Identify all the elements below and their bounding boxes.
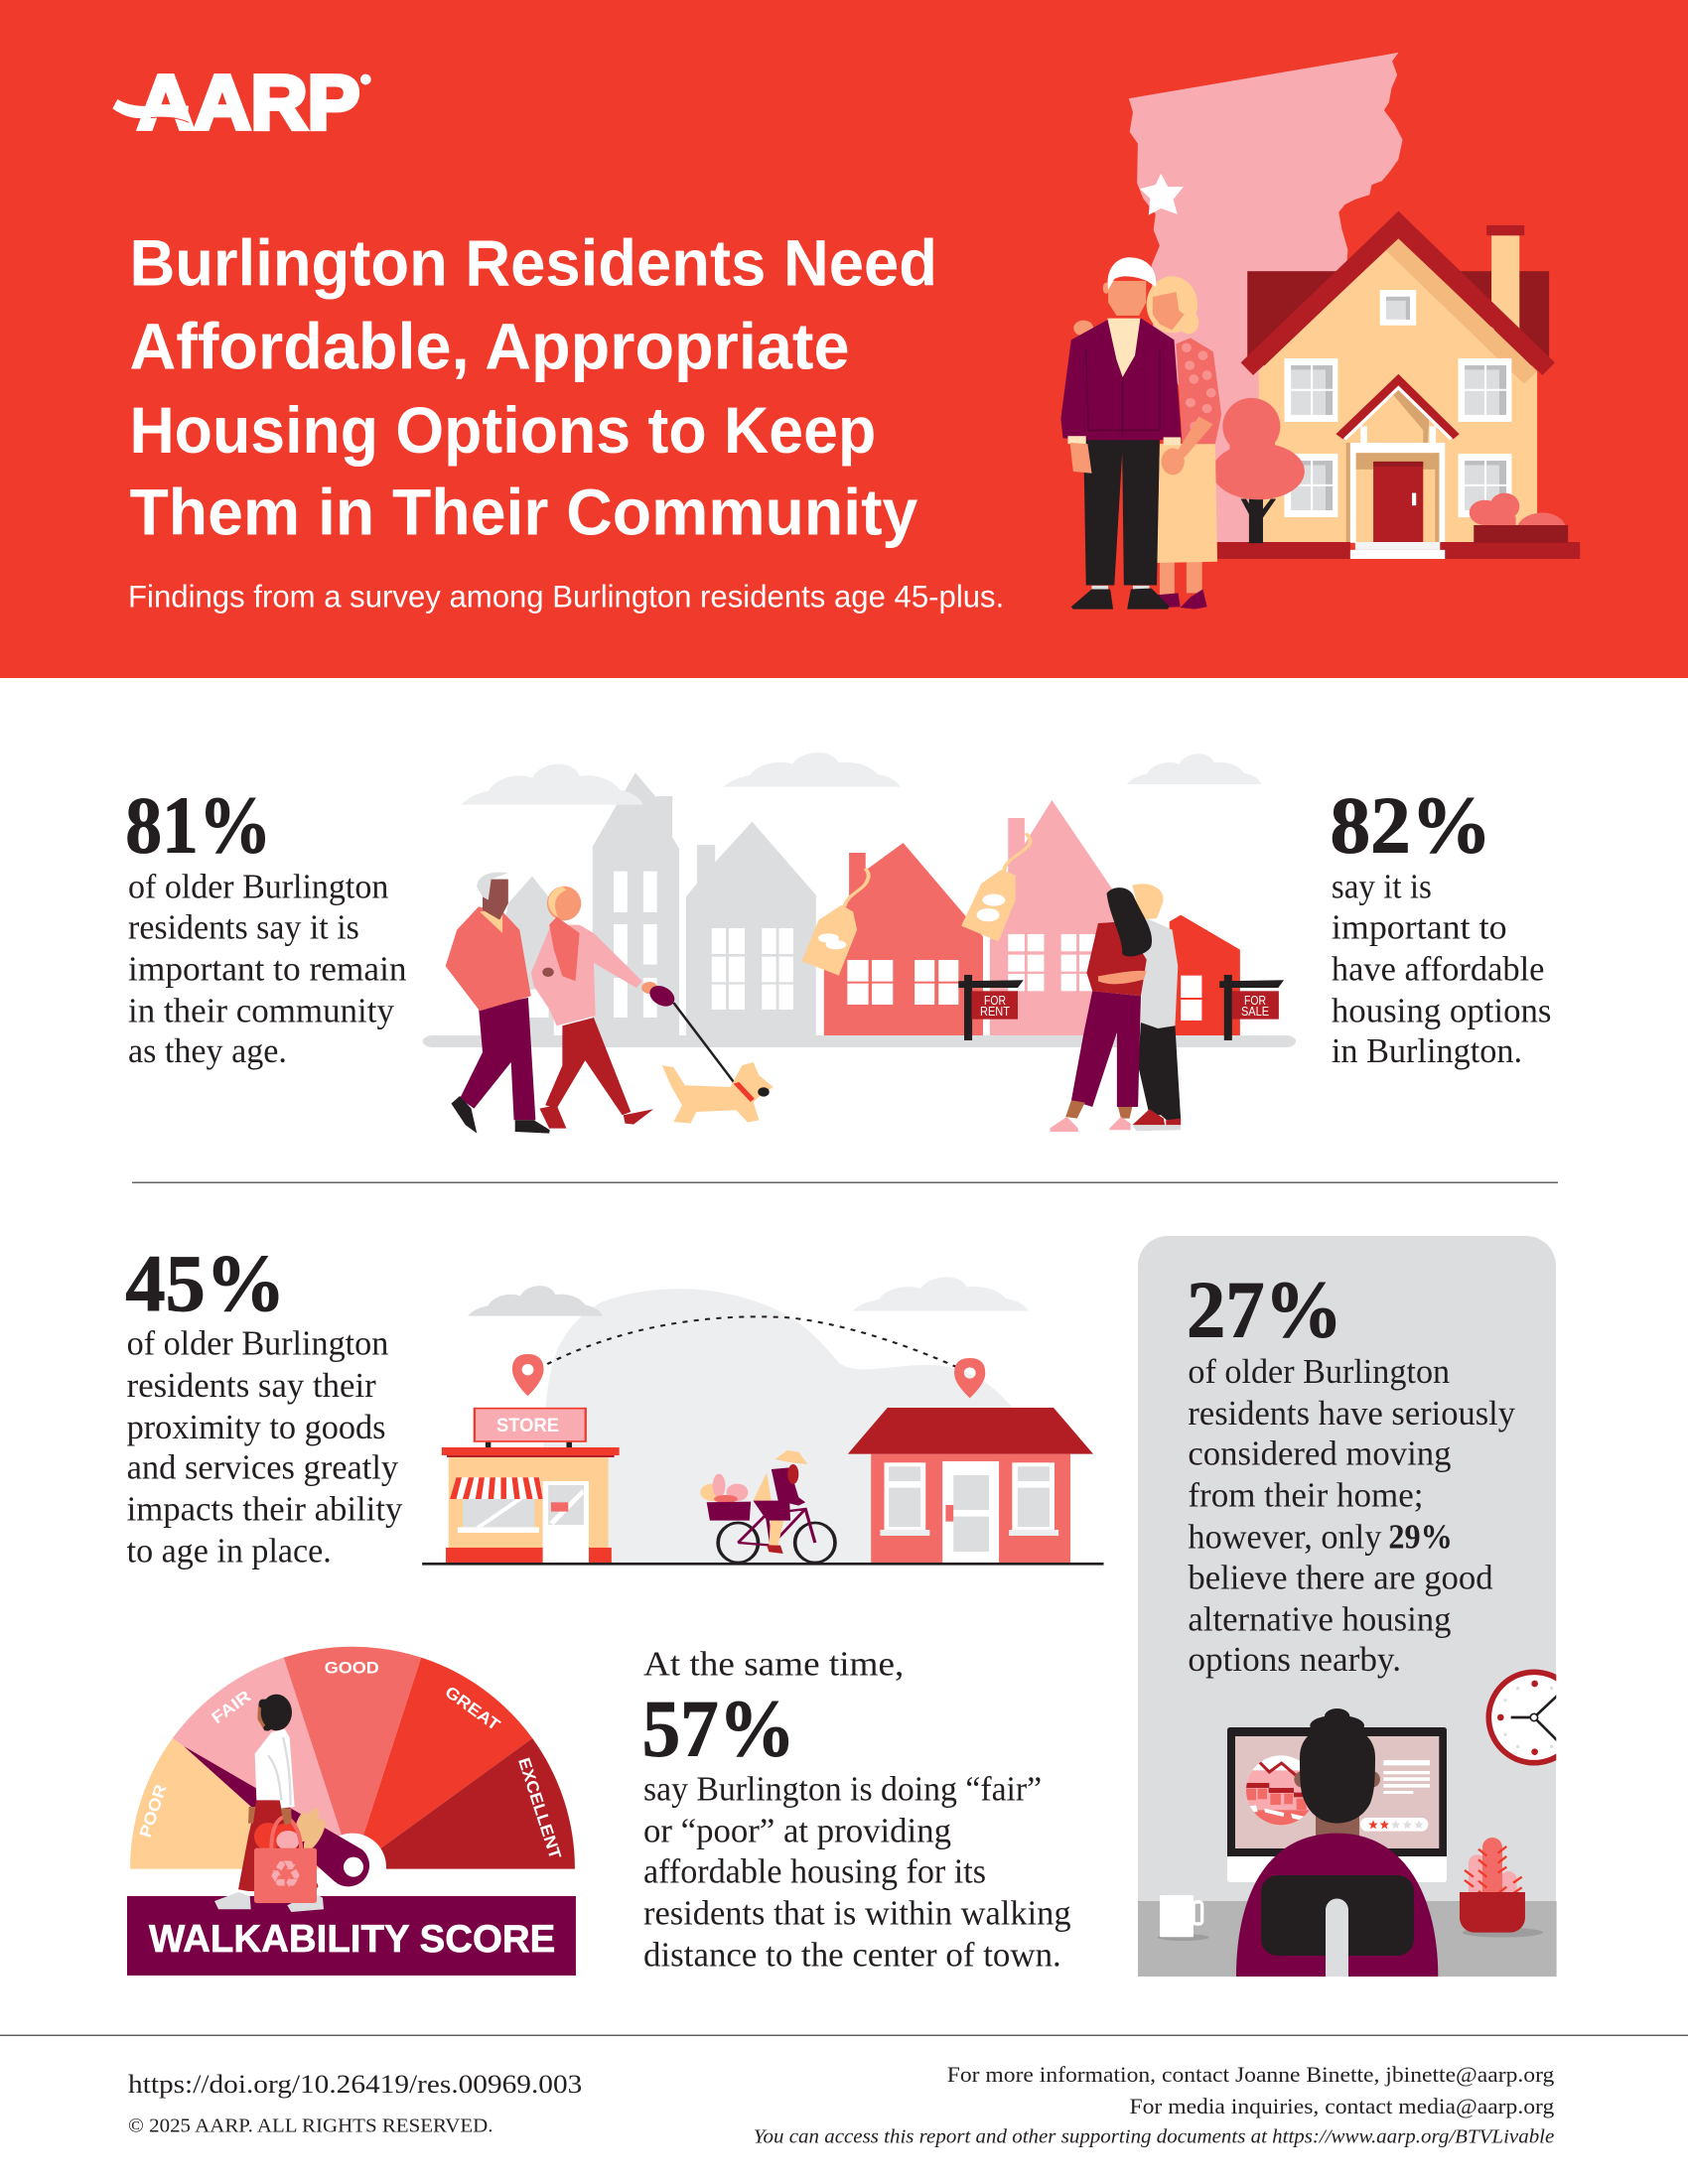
- walking couple: man: [446, 873, 550, 1134]
- house: [1217, 211, 1580, 559]
- panel text: alternative housing: [1188, 1599, 1452, 1638]
- clock: [1485, 1670, 1557, 1765]
- sign text: for sale: FOR: [1244, 994, 1266, 1008]
- embracing couple: [1050, 884, 1181, 1132]
- sign text: for rent: FOR: [984, 994, 1006, 1008]
- stat: 45%: proximity to goods: [127, 1408, 386, 1446]
- panel: 27% moving considered: [1138, 1236, 1580, 1977]
- title: Affordable, Appropriate: [129, 310, 850, 383]
- stat: 82%: [1330, 780, 1551, 1070]
- stat: 82%: 82%: [1330, 780, 1491, 870]
- panel text: from their home;: [1188, 1476, 1423, 1515]
- dashed route: [547, 1316, 955, 1367]
- ground line: [422, 1563, 1104, 1566]
- title: [129, 226, 937, 549]
- segment: great: [352, 1658, 532, 1869]
- state map of Vermont: [1129, 53, 1403, 542]
- cactus plant: [1460, 1838, 1543, 1938]
- segment: poor: [130, 1738, 352, 1869]
- desk: [1138, 1901, 1557, 1977]
- grey houses: [486, 772, 816, 1035]
- stat: 45%: residents say their: [127, 1366, 376, 1405]
- coral house: [824, 843, 983, 1035]
- store building: [442, 1409, 620, 1563]
- label: fair: FAIR: [208, 1687, 254, 1727]
- illustration: street with houses, walkers and couple: [423, 752, 1296, 1134]
- stat: 82%: important to: [1332, 907, 1507, 946]
- road: [423, 1035, 1296, 1047]
- stat: 82%: in Burlington.: [1332, 1031, 1522, 1070]
- woman with grocery bag: ♻: [268, 1853, 302, 1898]
- sign text: for sale: SALE: [1241, 1005, 1269, 1019]
- panel text: 27%: [1187, 1265, 1342, 1354]
- stat: 45%: impacts their ability: [127, 1490, 403, 1529]
- panel text: residents have seriously: [1188, 1394, 1515, 1433]
- stat: 81%: [125, 780, 407, 1070]
- stat: 57%: or “poor” at providing: [643, 1812, 951, 1850]
- icon: location star: [1140, 174, 1184, 215]
- dog on leash: [645, 984, 774, 1124]
- panel text: options nearby.: [1188, 1640, 1401, 1679]
- segment: good: [284, 1647, 421, 1869]
- panel text: believe there are good: [1188, 1558, 1493, 1596]
- segment: fair: [173, 1658, 352, 1869]
- sign text: for rent: RENT: [980, 1005, 1010, 1019]
- panel text: of older Burlington: [1188, 1352, 1450, 1391]
- logo: AARP: AARP: [137, 61, 359, 145]
- stat: 57%: say Burlington is doing “fair”: [643, 1770, 1042, 1809]
- title: Housing Options to Keep: [129, 393, 876, 467]
- cloud over grey house: [462, 764, 643, 805]
- stat: 45%: to age in place.: [127, 1532, 332, 1570]
- needle: [184, 1746, 369, 1886]
- stat: 82%: housing options: [1332, 992, 1551, 1030]
- label: poor: POOR: [136, 1782, 171, 1840]
- footer right: For media inquiries, contact media@aarp.org: [1130, 2095, 1554, 2118]
- for rent sign post: [958, 975, 1024, 1040]
- home building: [848, 1408, 1093, 1563]
- label: great: GREAT: [442, 1683, 503, 1734]
- stat: 82%: have affordable: [1332, 949, 1544, 988]
- sign text: for rent: [980, 994, 1010, 1019]
- illustration: person at computer: [1138, 1672, 1580, 1977]
- panel background: [1138, 1236, 1556, 1975]
- stat: 81%: as they age.: [128, 1031, 287, 1070]
- header banner: [0, 0, 1688, 678]
- stat: 81%: 81%: [125, 780, 272, 870]
- red house: [1170, 915, 1240, 1035]
- price tag left: [801, 869, 869, 976]
- panel text: considered moving: [1188, 1434, 1452, 1473]
- pin: home: [954, 1358, 985, 1398]
- stat: 45%: 45%: [125, 1239, 286, 1328]
- tree: [1212, 398, 1305, 543]
- stat: 57%: residents that is within walking: [643, 1893, 1071, 1932]
- stat: 57%: 57%: [642, 1685, 795, 1774]
- banner: walkability score: [127, 1896, 576, 1976]
- gauge: walkability score: [127, 1647, 576, 1976]
- sign text: for sale: [1241, 994, 1269, 1019]
- footer left: https://doi.org/10.26419/res.00969.003: [128, 2070, 582, 2099]
- clouds: [468, 1277, 1029, 1316]
- title: Them in Their Community: [129, 476, 918, 549]
- stat: 45%: [125, 1239, 403, 1570]
- pink house: [990, 800, 1115, 1035]
- footer right: [754, 2063, 1554, 2148]
- stat: 57%: [642, 1644, 1071, 1974]
- pin: store: [512, 1354, 544, 1396]
- illustration: store to home route with cyclist: [422, 1277, 1104, 1566]
- subtitle: Findings from a survey among Burlington residents age 45-plus.: [128, 579, 1004, 614]
- stat: 81%: of older Burlington: [128, 868, 388, 906]
- price tag right: [961, 833, 1031, 941]
- footer left: © 2025 AARP. ALL RIGHTS RESERVED.: [128, 2115, 493, 2136]
- stat: 81%: in their community: [128, 992, 394, 1030]
- footer left: [128, 2070, 582, 2136]
- label: excellent: EXCELLENT: [514, 1755, 565, 1861]
- panel text: 29%: [1388, 1518, 1453, 1557]
- store label: STORE: [496, 1416, 559, 1436]
- dollar marks: [818, 894, 1005, 949]
- walking couple: woman: [531, 887, 657, 1129]
- footer right: For more information, contact Joanne Binette, jbinette@aarp.org: [947, 2063, 1554, 2087]
- illustration: state, house and couple: [1060, 53, 1580, 610]
- stat: 81%: important to remain: [128, 949, 407, 988]
- stat: 45%: and services greatly: [127, 1448, 399, 1487]
- woman with grocery bag: [214, 1695, 330, 1912]
- person from behind: [1236, 1708, 1438, 1977]
- panel text: however, only: [1188, 1518, 1382, 1557]
- title: Burlington Residents Need: [129, 226, 937, 300]
- segment: excellent: [352, 1738, 575, 1869]
- for sale sign post: [1219, 975, 1284, 1040]
- monitor: [1227, 1727, 1447, 1882]
- banner text: WALKABILITY SCORE: [149, 1917, 555, 1961]
- stat: 45%: of older Burlington: [127, 1324, 388, 1363]
- footer right: You can access this report and other supporting documents at https://www.aarp.org/BTVLivable: [754, 2126, 1554, 2148]
- stat: 57%: At the same time,: [643, 1644, 904, 1683]
- stat: 57%: distance to the center of town.: [643, 1935, 1061, 1974]
- panel text: [1187, 1265, 1515, 1679]
- clouds: [724, 752, 1262, 787]
- cyclist: [700, 1450, 835, 1563]
- stat: 82%: say it is: [1332, 868, 1432, 906]
- stat: 57%: affordable housing for its: [643, 1851, 986, 1890]
- woman: [1147, 276, 1221, 610]
- hill backdrop: [543, 1289, 1013, 1563]
- mug: [1158, 1895, 1209, 1941]
- man: [1060, 257, 1182, 610]
- stat: 81%: residents say it is: [128, 907, 359, 946]
- label: good: GOOD: [325, 1658, 379, 1677]
